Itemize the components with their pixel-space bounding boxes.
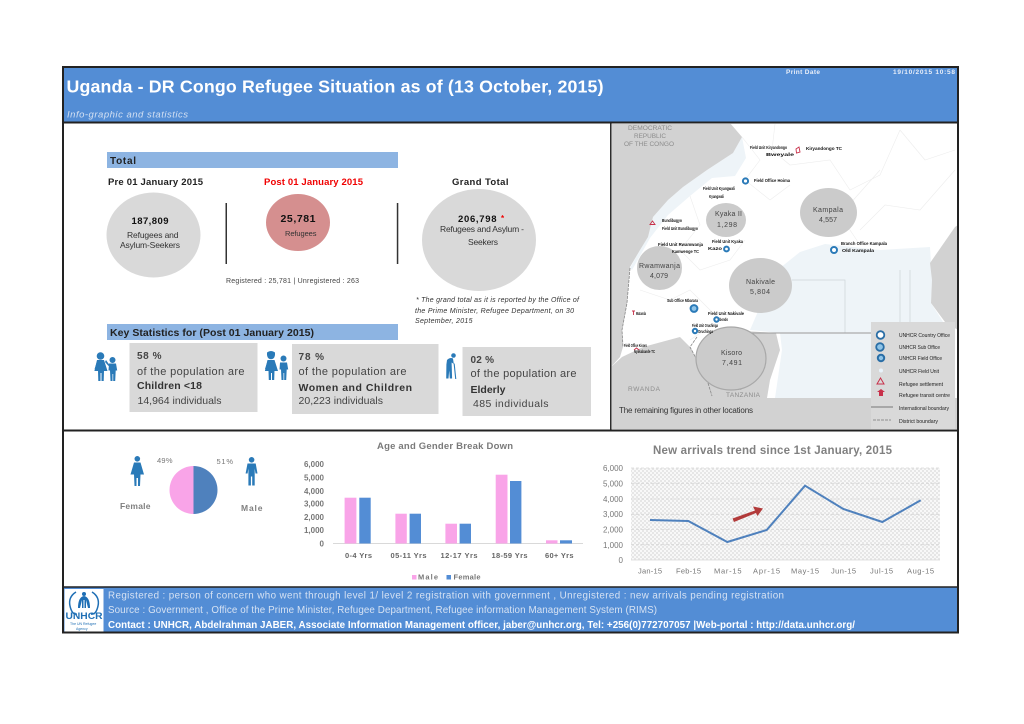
legend labels: International boundary bbox=[899, 406, 949, 412]
legend labels: UNHCR Country Office bbox=[899, 333, 950, 339]
y axis labels: 1,000 bbox=[603, 541, 624, 550]
legend labels: UNHCR Field Unit bbox=[899, 369, 940, 375]
map: settlement bubble kyaka: Kyaka II bbox=[715, 211, 742, 218]
map: office labels: Bundibugyo bbox=[662, 218, 682, 223]
map: office labels: Field Unit Bundibugyo bbox=[662, 226, 698, 231]
map: office labels: Kiryandongo TC bbox=[806, 146, 843, 151]
x axis labels: 18-59 Yrs bbox=[492, 551, 528, 560]
divider right bbox=[397, 203, 398, 264]
label: female: Female bbox=[120, 501, 151, 511]
x axis labels: May-15 bbox=[791, 566, 819, 576]
heading: key statistics: Key Statistics for (Post 01 January 2015) bbox=[110, 327, 314, 339]
stat: elderly: of the population are bbox=[470, 368, 576, 380]
map: settlement bubble rwamwanja: 4,079 bbox=[650, 273, 668, 280]
panel: totals bbox=[106, 152, 580, 325]
heading: total: Total bbox=[110, 156, 136, 167]
map: settlement bubble kisoro: Kisoro bbox=[721, 350, 742, 357]
chart legend: Female bbox=[454, 572, 480, 582]
map: neighbouring countries bbox=[611, 123, 958, 431]
legend labels bbox=[899, 333, 950, 425]
stat: elderly: Elderly bbox=[470, 384, 506, 396]
map: office labels: Branch Office Kampala bbox=[841, 241, 887, 246]
x axis labels: 12-17 Yrs bbox=[440, 551, 478, 560]
map: country labels: REPUBLIC bbox=[634, 133, 666, 140]
map: office labels: Rubondo bbox=[716, 317, 728, 322]
map: settlement bubble kisoro: 7,491 bbox=[722, 360, 742, 367]
map: settlement bubble kisoro bbox=[696, 327, 766, 390]
map: settlement bubble kampala: 4,557 bbox=[819, 217, 837, 224]
chart title: Age and Gender Break Down bbox=[377, 441, 513, 452]
map: office labels: Kazo bbox=[708, 246, 722, 251]
y axis labels: 4,000 bbox=[603, 495, 624, 504]
map: office labels: Oruchinga bbox=[698, 329, 713, 334]
map: office labels: Nyakabande TC bbox=[634, 349, 655, 354]
map: settlement bubble rwamwanja: Rwamwanja bbox=[639, 263, 680, 270]
x axis labels: Aug-15 bbox=[907, 566, 934, 576]
circle: pre 2015 bbox=[106, 192, 200, 278]
y axis labels: 5,000 bbox=[304, 474, 325, 482]
legend labels: UNHCR Sub Office bbox=[899, 345, 940, 351]
chart title: New arrivals trend since 1st January, 2015 bbox=[653, 445, 893, 457]
circle: post 2015 bbox=[266, 194, 330, 251]
subtitle: Info-graphic and statistics bbox=[67, 110, 188, 120]
map: country labels: DEMOCRATIC bbox=[628, 125, 672, 132]
heading: total bbox=[107, 152, 398, 168]
icon: male bbox=[246, 457, 258, 486]
circle: pre 2015: 187,809 bbox=[132, 216, 168, 227]
stat: elderly: 02 % bbox=[470, 355, 494, 366]
map: office labels: Kamwenge TC bbox=[672, 249, 700, 254]
divider left bbox=[226, 203, 227, 264]
map: settlement bubble kampala: Kampala bbox=[813, 207, 843, 214]
stat: women and children: 20,223 individuals bbox=[298, 395, 383, 407]
y axis labels bbox=[603, 464, 624, 565]
x axis labels: Feb-15 bbox=[676, 566, 701, 576]
bars male bbox=[345, 475, 558, 544]
map: settlement bubble nakivale: Nakivale bbox=[746, 279, 775, 286]
map: office labels: Field Unit Rwamwanja bbox=[658, 242, 703, 247]
circle: grand total: 206,798 bbox=[458, 214, 496, 225]
y axis labels: 2,000 bbox=[603, 526, 624, 534]
UNHCR logo bbox=[64, 589, 104, 632]
legend labels: UNHCR Field Office bbox=[899, 356, 942, 362]
circle: grand total bbox=[422, 189, 536, 291]
map: office labels: Field Unit Kiryandongo bbox=[750, 145, 787, 150]
x axis labels bbox=[638, 566, 934, 576]
bar chart: age and gender bbox=[304, 441, 583, 582]
panel: key statistics bbox=[94, 324, 591, 416]
map: country labels bbox=[624, 125, 761, 399]
print date value: 19/10/2015 10:58 bbox=[893, 69, 955, 76]
chart legend bbox=[412, 572, 480, 582]
stat: children: 14,964 individuals bbox=[138, 395, 222, 407]
map: settlement bubble kampala bbox=[800, 188, 857, 237]
contact: Contact : UNHCR, Abdelrahman JABER, Associate Information Management officer, jaber@unhcr.org, Tel: +256(0)772707057 |Web-portal : http://data.unhcr.org/ bbox=[108, 620, 855, 631]
map: office labels: Old Kampala bbox=[842, 248, 875, 253]
map: country labels: U.R. OF bbox=[725, 386, 743, 392]
grand total footnote: * The grand total as it is reported by the Office of bbox=[416, 297, 580, 304]
map: country labels: OF THE CONGO bbox=[624, 141, 674, 148]
circle: grand total: * bbox=[501, 214, 505, 223]
label: male: Male bbox=[241, 503, 263, 513]
panel: gender pie bbox=[120, 456, 263, 514]
map legend bbox=[871, 322, 955, 429]
y axis labels: 2,000 bbox=[304, 513, 325, 522]
y axis labels: 0 bbox=[619, 556, 624, 565]
y axis labels: 1,000 bbox=[304, 526, 325, 535]
map: settlement bubble kyaka bbox=[706, 203, 746, 237]
stat: women and children: of the population are bbox=[298, 366, 406, 378]
stat: women and children: 78 % bbox=[298, 352, 324, 363]
pie chart bbox=[170, 466, 218, 514]
UNHCR logo: The UN Refugee bbox=[70, 622, 96, 626]
x axis labels: Apr-15 bbox=[753, 566, 780, 576]
x axis labels: Jun-15 bbox=[831, 566, 856, 576]
grand total footnote bbox=[415, 297, 580, 325]
map: refugee site markers bbox=[632, 147, 800, 350]
map: office labels: Field Office Hoima bbox=[754, 178, 790, 183]
map: country labels: RWANDA bbox=[628, 386, 661, 393]
print date: Print Date bbox=[786, 69, 820, 76]
trend line bbox=[650, 486, 921, 542]
title: Uganda - DR Congo Refugee Situation as of (13 October, 2015) bbox=[66, 76, 604, 96]
plot area bbox=[631, 468, 940, 560]
column heading: grand total: Grand Total bbox=[452, 177, 508, 188]
map: protected area lines bbox=[792, 270, 910, 332]
circle: pre 2015: Asylum-Seekers bbox=[120, 240, 180, 250]
map: office labels: Field Office Kisoro bbox=[624, 343, 647, 348]
source: Source : Government , Office of the Prime Minister, Refugee Department, Refugee information Management System (RIMS) bbox=[108, 605, 657, 616]
x axis labels: 0-4 Yrs bbox=[345, 551, 372, 560]
map: water bodies bbox=[630, 137, 955, 398]
x axis labels: Jan-15 bbox=[638, 566, 662, 576]
x axis labels bbox=[345, 551, 574, 560]
x axis labels: Mar-15 bbox=[714, 566, 742, 576]
circle: grand total: Seekers bbox=[468, 237, 498, 247]
bars female bbox=[359, 481, 572, 544]
panel: map bbox=[611, 123, 958, 431]
column heading: post 2015: Post 01 January 2015 bbox=[264, 177, 364, 188]
stat: children bbox=[130, 343, 258, 412]
map: office labels bbox=[624, 145, 887, 354]
map: country labels: TANZANIA bbox=[726, 392, 761, 399]
icon: mother and child bbox=[94, 352, 117, 381]
stat: women and children bbox=[292, 344, 438, 414]
y axis labels: 6,000 bbox=[304, 460, 325, 469]
line chart: new arrivals bbox=[603, 445, 940, 576]
legend labels: District boundary bbox=[899, 419, 939, 425]
UNHCR logo: UNHCR bbox=[66, 611, 103, 622]
map: settlement bubble nakivale: 5,804 bbox=[750, 289, 770, 296]
y axis labels: 4,000 bbox=[304, 487, 325, 496]
map: settlement bubble kyaka: 1,298 bbox=[717, 222, 737, 229]
UNHCR logo: Agency bbox=[76, 627, 88, 631]
map: office markers bbox=[691, 178, 837, 333]
column heading: pre 2015: Pre 01 January 2015 bbox=[108, 177, 204, 188]
y axis labels: 5,000 bbox=[603, 480, 624, 488]
legend labels: Refugee settlement bbox=[899, 382, 944, 388]
arrow bbox=[732, 506, 763, 522]
circle: pre 2015: Refugees and bbox=[127, 230, 179, 240]
grand total footnote: September, 2015 bbox=[415, 318, 473, 325]
stat: children: Children <18 bbox=[137, 380, 202, 392]
registered definition: Registered : person of concern who went through level 1/ level 2 registration with government , Unregistered : new arrivals pending registration bbox=[108, 590, 784, 602]
map: office labels: Field Unit Oruchinga bbox=[692, 323, 718, 328]
grand total footnote: the Prime Minister, Refugee Department, on 30 bbox=[415, 308, 574, 315]
frame bbox=[63, 67, 958, 632]
x axis labels: 60+ Yrs bbox=[545, 551, 574, 560]
remaining figures caption: The remaining figures in other locations bbox=[619, 406, 753, 415]
map: office labels: Field Unit Nakivale bbox=[708, 311, 744, 316]
circle: grand total: Refugees and Asylum - bbox=[440, 224, 524, 234]
x axis labels: Jul-15 bbox=[870, 566, 893, 576]
map: office labels: Kyangwali bbox=[709, 194, 724, 199]
icon: elderly person bbox=[446, 353, 456, 379]
footer banner bbox=[63, 587, 958, 632]
stat: women and children: Women and Children bbox=[298, 382, 412, 394]
stat: elderly: 485 individuals bbox=[473, 398, 548, 410]
label: 51 percent: 51% bbox=[216, 457, 233, 466]
stat: elderly bbox=[462, 347, 591, 416]
header banner bbox=[63, 67, 958, 122]
registered note: Registered : 25,781 | Unregistered : 263 bbox=[226, 278, 359, 285]
map: settlement bubble rwamwanja bbox=[637, 246, 682, 290]
icon: female bbox=[130, 456, 144, 486]
heading: key statistics bbox=[107, 324, 398, 340]
grid lines bbox=[631, 468, 940, 560]
label: 49 percent: 49% bbox=[157, 456, 173, 465]
y axis labels: 3,000 bbox=[603, 510, 624, 519]
stat: children: of the population are bbox=[137, 366, 244, 378]
stat: children: 58 % bbox=[137, 351, 162, 362]
map: office labels: Field Unit Kyaka bbox=[712, 239, 743, 244]
legend icons bbox=[871, 331, 893, 420]
y axis labels: 0 bbox=[320, 540, 325, 548]
x axis labels: 05-11 Yrs bbox=[390, 551, 426, 560]
map: district boundaries bbox=[640, 124, 955, 340]
y axis labels: 3,000 bbox=[304, 500, 325, 508]
map: office labels: Bweyale bbox=[766, 152, 795, 157]
map: office labels: Field Unit Kyangwali bbox=[703, 186, 735, 191]
legend labels: Refugee transit centre bbox=[899, 393, 950, 399]
y axis labels: 6,000 bbox=[603, 464, 624, 473]
y axis labels bbox=[304, 460, 325, 548]
chart legend: Male bbox=[418, 572, 438, 582]
circle: post 2015: Refugees bbox=[285, 229, 317, 238]
circle: post 2015: 25,781 bbox=[280, 213, 316, 225]
icon: woman and child bbox=[265, 351, 288, 380]
map: office labels: Matanda bbox=[636, 311, 646, 316]
map: office labels: Sub Office Mbarara bbox=[667, 298, 698, 303]
map: settlement bubble nakivale bbox=[729, 258, 792, 313]
